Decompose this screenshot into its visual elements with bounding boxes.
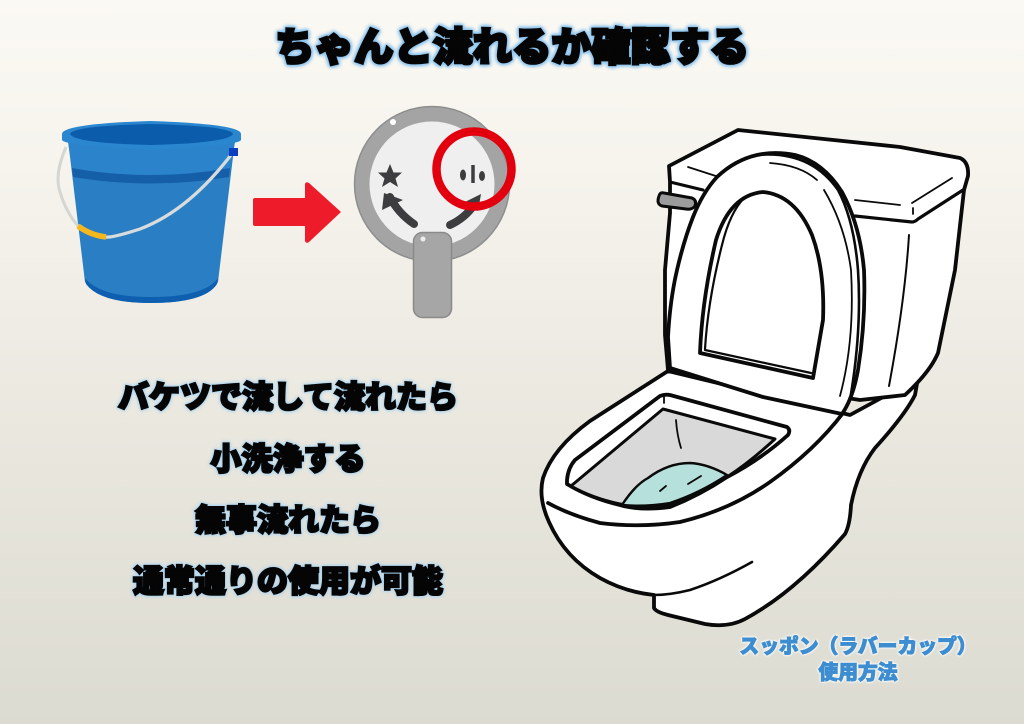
arrow: red right arrow	[253, 182, 341, 243]
bowl rim opening	[567, 395, 789, 509]
icon: flush lever dial	[354, 106, 510, 318]
toilet bowl and pedestal	[541, 371, 918, 625]
caption: スッポン（ラバーカップ）	[739, 636, 977, 658]
callout: red circle	[436, 132, 512, 206]
line 3: 無事流れたら	[195, 503, 381, 538]
line 1: バケツで流して流れたら	[118, 380, 458, 415]
bowl lip line	[548, 413, 843, 525]
water	[622, 463, 727, 506]
icon: blue bucket	[58, 121, 241, 303]
caption: 使用方法	[818, 662, 898, 684]
toilet tank	[665, 130, 968, 400]
flush lever	[658, 193, 696, 209]
line 2: 小洗浄する	[210, 442, 366, 477]
toilet seat lid	[668, 153, 864, 414]
text block: instructions	[116, 377, 458, 599]
caption	[739, 634, 977, 684]
title: ちゃんと流れるか確認する	[275, 26, 749, 70]
illustration: white toilet	[541, 130, 968, 625]
bowl lower curve	[654, 562, 752, 595]
bowl interior	[571, 409, 775, 506]
line 4: 通常通りの使用が可能	[133, 564, 443, 599]
